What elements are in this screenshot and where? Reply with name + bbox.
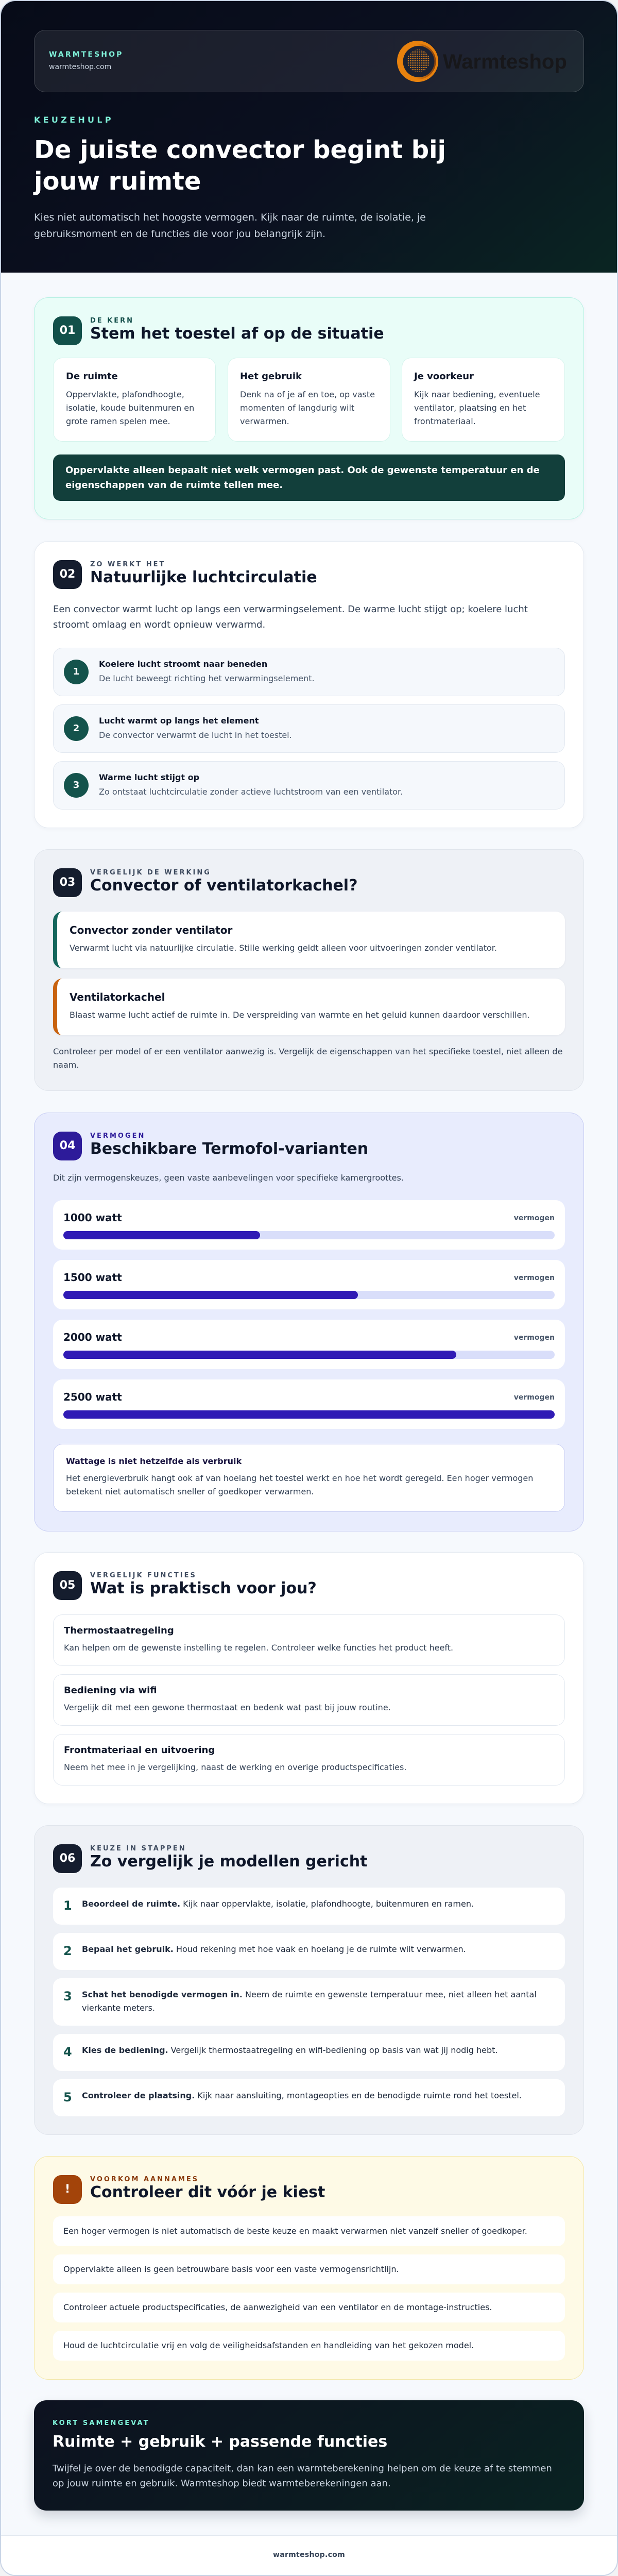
card text: Blaast warme lucht actief de ruimte in. De verspreiding van warmte en het geluid kunnen daardoor verschillen.: [70, 1010, 530, 1020]
unit: vermogen: [514, 1393, 555, 1402]
badge 01: 01: [60, 324, 75, 337]
card text: momenten of langdurig wilt: [240, 403, 354, 413]
unit: vermogen: [514, 1334, 555, 1342]
item text: Houd de luchtcirculatie vrij en volg de veiligheidsafstanden en handleiding van het gekozen model.: [63, 2341, 474, 2350]
eyebrow: VOORKOM AANNAMES: [90, 2176, 199, 2183]
card: je voorkeur: [402, 358, 565, 442]
heading: Zo vergelijk je modellen gericht: [90, 1853, 367, 1871]
intro: gebruiksmoment en de functies die voor jou belangrijk zijn.: [34, 228, 325, 240]
hero header: [1, 1, 617, 273]
step heading: Lucht warmt op langs het element: [99, 716, 259, 726]
card text: Verwarmt lucht via natuurlijke circulatie. Stille werking geldt alleen voor uitvoeringen zonder ventilator.: [70, 943, 497, 953]
eyebrow: VERGELIJK DE WERKING: [90, 869, 211, 877]
step 2: [53, 1933, 565, 1970]
heading: Natuurlijke luchtcirculatie: [90, 568, 317, 586]
panel: 01 de kern: [34, 297, 584, 519]
item text: Een hoger vermogen is niet automatisch de beste keuze en maakt verwarmen niet vanzelf sneller of goedkoper.: [63, 2226, 527, 2236]
badge 04: 04: [60, 1139, 75, 1152]
step 5: [53, 2079, 565, 2116]
card text: Kijk naar bediening, eventuele: [414, 390, 540, 399]
info text: Het energieverbruik hangt ook af van hoelang het toestel werkt en hoe het wordt geregeld. Een hoger vermogen: [66, 1473, 533, 1483]
feature: frontmateriaal: [53, 1734, 565, 1786]
card: het gebruik: [228, 358, 390, 442]
step 3: [53, 1978, 565, 2026]
info heading: Wattage is niet hetzelfde als verbruik: [66, 1456, 242, 1466]
feature: bediening via wifi: [53, 1674, 565, 1726]
card heading: De ruimte: [66, 371, 118, 382]
feature heading: Thermostaatregeling: [64, 1625, 174, 1636]
track: [63, 1351, 555, 1359]
badge 02: 02: [60, 568, 75, 581]
item 3: [53, 2293, 565, 2322]
step 2: [53, 704, 565, 753]
step heading: Warme lucht stijgt op: [99, 772, 199, 782]
card: de ruimte: [53, 358, 216, 442]
badge 05: 05: [60, 1579, 75, 1592]
callout text: eigenschappen van de ruimte tellen mee.: [65, 480, 283, 491]
badge warning: !: [65, 2183, 70, 2196]
callout: [53, 454, 565, 501]
heading: Wat is praktisch voor jou?: [90, 1579, 317, 1597]
panel: 03 vergelijk de werking: [34, 849, 584, 1091]
info text: [66, 1473, 533, 1496]
title: [33, 136, 446, 196]
bar: 1500 watt: [53, 1260, 565, 1309]
text: Schat het benodigde vermogen in. Neem de ruimte en gewenste temperatuur mee, niet alleen het aantal: [82, 1990, 537, 1999]
feature text: Vergelijk dit met een gewone thermostaat en bedenk wat past bij jouw routine.: [64, 1703, 391, 1712]
feature text: Kan helpen om de gewenste instelling te regelen. Controleer welke functies het product heeft.: [64, 1643, 453, 1653]
number: 1: [63, 1898, 72, 1913]
heading: Convector of ventilatorkachel?: [90, 877, 357, 895]
feature text: Neem het mee in je vergelijking, naast de werking en overige productspecificaties.: [64, 1762, 406, 1772]
summary text: op jouw ruimte en gebruik. Warmteshop biedt warmteberekeningen aan.: [53, 2478, 391, 2489]
unit: vermogen: [514, 1274, 555, 1282]
note: Controleer per model of er een ventilator aanwezig is. Vergelijk de eigenschappen van het specifieke toestel, niet alleen de: [53, 1047, 562, 1056]
card text: [414, 390, 540, 426]
icon: Warmteshop logo: [397, 41, 567, 82]
intro: Kies niet automatisch het hoogste vermogen. Kijk naar de ruimte, de isolatie, je: [34, 212, 426, 223]
step text: De convector verwarmt de lucht in het toestel.: [99, 730, 292, 740]
text: [82, 1990, 537, 2013]
label: 1000 watt: [63, 1211, 122, 1224]
title: jouw ruimte: [34, 167, 201, 196]
label: 1500 watt: [63, 1271, 122, 1284]
card text: isolatie, koude buitenmuren en: [66, 403, 194, 413]
eyebrow: VERGELIJK FUNCTIES: [90, 1572, 197, 1579]
text: Bepaal het gebruik. Houd rekening met hoe vaak en hoelang je de ruimte wilt verwarmen.: [82, 1944, 466, 1954]
track: [63, 1410, 555, 1419]
text: Beoordeel de ruimte. Kijk naar oppervlakte, isolatie, plafondhoogte, buitenmuren en ramen.: [82, 1899, 474, 1909]
callout text: Oppervlakte alleen bepaalt niet welk vermogen past. Ook de gewenste temperatuur en de: [65, 465, 540, 476]
label: 2000 watt: [63, 1331, 122, 1343]
callout text: [65, 465, 540, 491]
step number: [64, 660, 89, 684]
card text: frontmateriaal.: [414, 416, 476, 426]
text: vierkante meters.: [82, 2003, 155, 2013]
step 1: [53, 1888, 565, 1925]
card: convector: [53, 912, 565, 968]
badge warning: [53, 2175, 82, 2204]
info box: [53, 1444, 565, 1512]
heading: Ruimte + gebruik + passende functies: [53, 2433, 387, 2451]
card text: grote ramen spelen mee.: [66, 416, 170, 426]
eyebrow: DE KERN: [90, 317, 134, 325]
card text: Oppervlakte, plafondhoogte,: [66, 390, 184, 399]
heading: Beschikbare Termofol-varianten: [90, 1140, 368, 1158]
footer: [1, 2535, 617, 2575]
intro: [34, 212, 426, 240]
item text: Oppervlakte alleen is geen betrouwbare basis voor een vaste vermogensrichtlijn.: [63, 2264, 399, 2274]
badge 03: 03: [60, 876, 75, 889]
step number: 2: [73, 723, 79, 734]
text: Controleer de plaatsing. Kijk naar aansluiting, montageopties en de benodigde ruimte rond het toestel.: [82, 2091, 522, 2100]
badge 05: [53, 1571, 82, 1600]
icon: Warmteshop logo: Warmteshop: [443, 50, 567, 73]
badge 03: [53, 868, 82, 897]
track: [63, 1291, 555, 1299]
card text: [240, 390, 375, 426]
step 4: [53, 2034, 565, 2071]
card text: [66, 390, 194, 426]
eyebrow: KEUZEHULP: [34, 115, 114, 125]
heading: Controleer dit vóór je kiest: [90, 2183, 325, 2201]
bar: 2000 watt: [53, 1320, 565, 1369]
card heading: Je voorkeur: [414, 371, 474, 382]
badge 06: [53, 1844, 82, 1873]
card heading: Convector zonder ventilator: [70, 924, 232, 936]
badge 04: [53, 1132, 82, 1160]
card text: ventilator, plaatsing en het: [414, 403, 526, 413]
item 4: [53, 2331, 565, 2361]
step number: [64, 773, 89, 798]
step number: 1: [73, 666, 79, 677]
card heading: Het gebruik: [240, 371, 302, 382]
number: 4: [63, 2045, 72, 2059]
info text: betekent niet automatisch sneller of goedkoper verwarmen.: [66, 1487, 314, 1496]
intro text: Een convector warmt lucht op langs een verwarmingselement. De warme lucht stijgt op; koelere lucht: [53, 604, 528, 615]
panel: kort samengevat: [34, 2400, 584, 2511]
intro text: Dit zijn vermogenskeuzes, geen vaste aanbevelingen voor specifieke kamergroottes.: [53, 1173, 404, 1183]
bar: 1000 watt: [53, 1200, 565, 1250]
panel: 04 vermogen: [34, 1113, 584, 1531]
intro text: stroomt omlaag en wordt opnieuw verwarmd.: [53, 619, 265, 630]
panel: 02 zo werkt het: [34, 541, 584, 828]
eyebrow: KORT SAMENGEVAT: [53, 2419, 150, 2427]
feature heading: Frontmateriaal en uitvoering: [64, 1745, 215, 1756]
intro text: [53, 604, 528, 630]
step heading: Koelere lucht stroomt naar beneden: [99, 659, 267, 669]
badge 06: 06: [60, 1852, 75, 1865]
unit: vermogen: [514, 1214, 555, 1222]
brand bar: [34, 30, 584, 92]
summary text: Twijfel je over de benodigde capaciteit, dan kan een warmteberekening helpen om de keuze af te stemmen: [53, 2463, 552, 2474]
number: 5: [63, 2090, 72, 2104]
badge 01: [53, 316, 82, 345]
step 3: [53, 761, 565, 810]
bar: 2500 watt: [53, 1379, 565, 1429]
step 1: [53, 648, 565, 696]
panel: voorkom aannames: [34, 2156, 584, 2380]
card heading: Ventilatorkachel: [70, 991, 165, 1003]
item 1: [53, 2216, 565, 2246]
eyebrow: KEUZE IN STAPPEN: [90, 1845, 186, 1853]
card text: verwarmen.: [240, 416, 289, 426]
badge 02: [53, 560, 82, 589]
item text: Controleer actuele productspecificaties, de aanwezigheid van een ventilator en de montage-instructies.: [63, 2302, 492, 2312]
item 2: [53, 2254, 565, 2284]
panel: 06 keuze in stappen: [34, 1825, 584, 2135]
step text: De lucht beweegt richting het verwarmingselement.: [99, 674, 315, 683]
footer text: warmteshop.com: [273, 2551, 345, 2559]
note: naam.: [53, 1060, 79, 1070]
number: 3: [63, 1989, 72, 2003]
track: [63, 1231, 555, 1239]
brand name: WARMTESHOP: [49, 50, 123, 59]
step text: Zo ontstaat luchtcirculatie zonder actieve luchtstroom van een ventilator.: [99, 787, 403, 797]
heading: Stem het toestel af op de situatie: [90, 325, 384, 343]
feature: thermostaatregeling: [53, 1614, 565, 1666]
step number: [64, 716, 89, 741]
title: De juiste convector begint bij: [34, 136, 446, 164]
card: ventilatorkachel: [53, 979, 565, 1035]
number: 2: [63, 1944, 72, 1958]
eyebrow: VERMOGEN: [90, 1132, 145, 1140]
feature heading: Bediening via wifi: [64, 1685, 157, 1696]
label: 2500 watt: [63, 1391, 122, 1403]
card text: Denk na of je af en toe, op vaste: [240, 390, 375, 399]
text: Kies de bediening. Vergelijk thermostaatregeling en wifi-bediening op basis van wat jij nodig hebt.: [82, 2045, 497, 2055]
note: [53, 1047, 562, 1070]
panel: 05 vergelijk functies: [34, 1552, 584, 1804]
summary text: [53, 2463, 552, 2489]
brand url: warmteshop.com: [49, 63, 111, 71]
eyebrow: ZO WERKT HET: [90, 561, 165, 568]
step number: 3: [73, 780, 79, 790]
